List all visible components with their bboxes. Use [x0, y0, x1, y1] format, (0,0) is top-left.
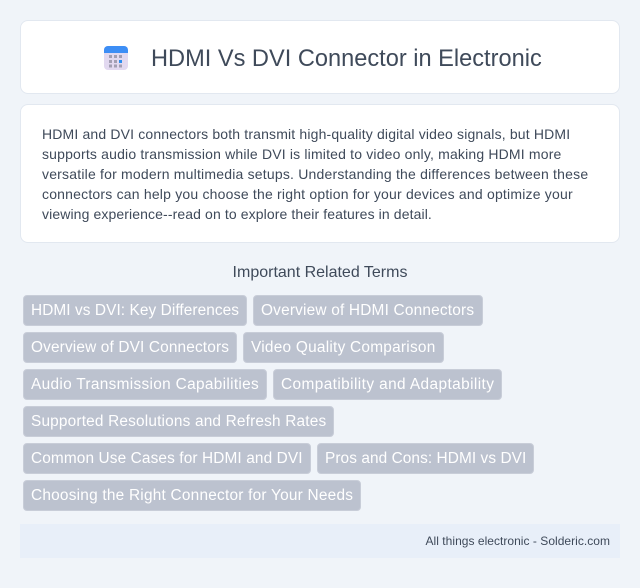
tag: [23, 480, 361, 511]
tag: [243, 332, 444, 363]
tag: HDMI vs DVI: Key Differences: [31, 302, 239, 319]
tag: [253, 295, 483, 326]
tag: Supported Resolutions and Refresh Rates: [31, 413, 326, 430]
tag: Pros and Cons: HDMI vs DVI: [325, 450, 526, 467]
text block: introduction: connectors can help you choose the right option for your devices and optimize your: [42, 186, 573, 202]
panel: intro text: [20, 104, 620, 243]
tag: Overview of DVI Connectors: [31, 339, 229, 356]
text block: introduction: [42, 126, 588, 222]
tag: [23, 295, 247, 326]
text block: introduction: HDMI and DVI connectors both transmit high-quality digital video signals, but HDMI: [42, 126, 570, 142]
title: HDMI Vs DVI Connector in Electronic: [151, 46, 542, 72]
tag: [23, 443, 311, 474]
tag: [273, 369, 502, 400]
heading: related terms: Important Related Terms: [233, 264, 407, 281]
tag: Video Quality Comparison: [251, 339, 436, 356]
tag: [317, 443, 534, 474]
tag: [23, 406, 334, 437]
tag: Audio Transmission Capabilities: [31, 376, 259, 393]
footer text: All things electronic - Solderic.com: [426, 534, 610, 548]
icon: calendar: [104, 46, 128, 70]
panel: term tags: [23, 295, 534, 511]
text block: introduction: versatile for modern multimedia setups. Understanding the differences between these: [42, 166, 588, 182]
tag: Overview of HDMI Connectors: [261, 302, 474, 319]
tag: Choosing the Right Connector for Your Needs: [31, 487, 353, 504]
tag: Common Use Cases for HDMI and DVI: [31, 450, 303, 467]
panel: header: [20, 20, 620, 94]
tag: Compatibility and Adaptability: [281, 376, 494, 393]
footer: [20, 524, 620, 558]
text block: introduction: supports audio transmission while DVI is limited to video only, making HDMI more: [42, 146, 562, 162]
tag: [23, 332, 237, 363]
text block: introduction: viewing experience--read on to explore their features in detail.: [42, 206, 432, 222]
tag: [23, 369, 267, 400]
